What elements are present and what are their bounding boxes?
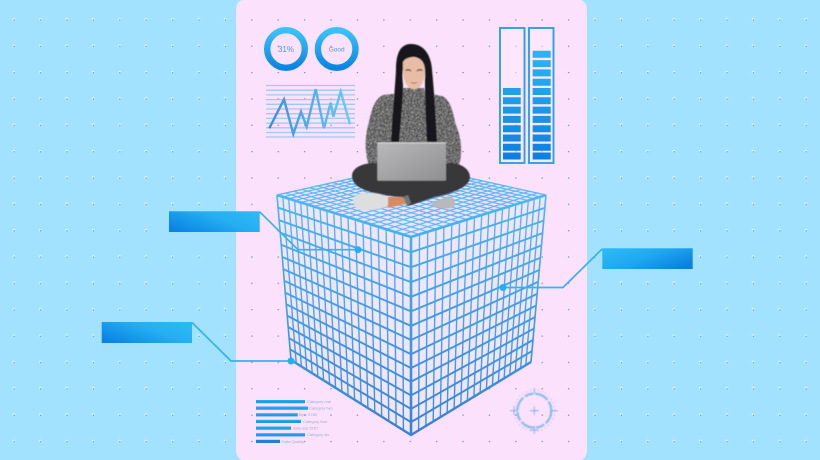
callout: upper left (169, 211, 362, 253)
callout: lower left (102, 322, 294, 364)
horizontal bar list: Category four (303, 419, 328, 424)
sock cuff (403, 195, 411, 206)
cube top grid (277, 165, 546, 234)
laptop (377, 142, 446, 181)
horizontal bar list: Data Quality (282, 439, 304, 444)
donut charts (267, 30, 356, 68)
horizontal bar list: Category one (307, 399, 332, 404)
cube faces (277, 165, 546, 435)
sweater (366, 88, 461, 166)
woman with laptop (352, 44, 470, 210)
callout: right (500, 248, 693, 291)
data cube (277, 165, 546, 435)
horizontal bar list (256, 399, 333, 444)
central pink panel (236, 0, 587, 460)
meter: right (529, 28, 554, 163)
hair (391, 44, 437, 142)
cube vertical grid (283, 197, 540, 430)
horizontal bar list: Category six (307, 432, 329, 437)
horizontal bar list: Category two (309, 406, 333, 410)
right shoe (431, 196, 455, 209)
target radar icon (510, 388, 558, 434)
bare ankle (386, 197, 406, 208)
vertical level meters (500, 28, 554, 163)
horizontal bar list: data use 5767 (293, 426, 319, 430)
donut: good: Good (329, 46, 345, 54)
horizontal bar list: Byte 2780 (299, 412, 318, 417)
legs (352, 163, 470, 206)
donut: 31 percent: 31% (278, 45, 294, 54)
cube horizontal grid (278, 208, 545, 422)
left shoe (353, 193, 388, 210)
line chart (266, 86, 355, 137)
face (403, 57, 425, 90)
cube outer edges (277, 165, 546, 435)
meter: left (500, 28, 524, 163)
